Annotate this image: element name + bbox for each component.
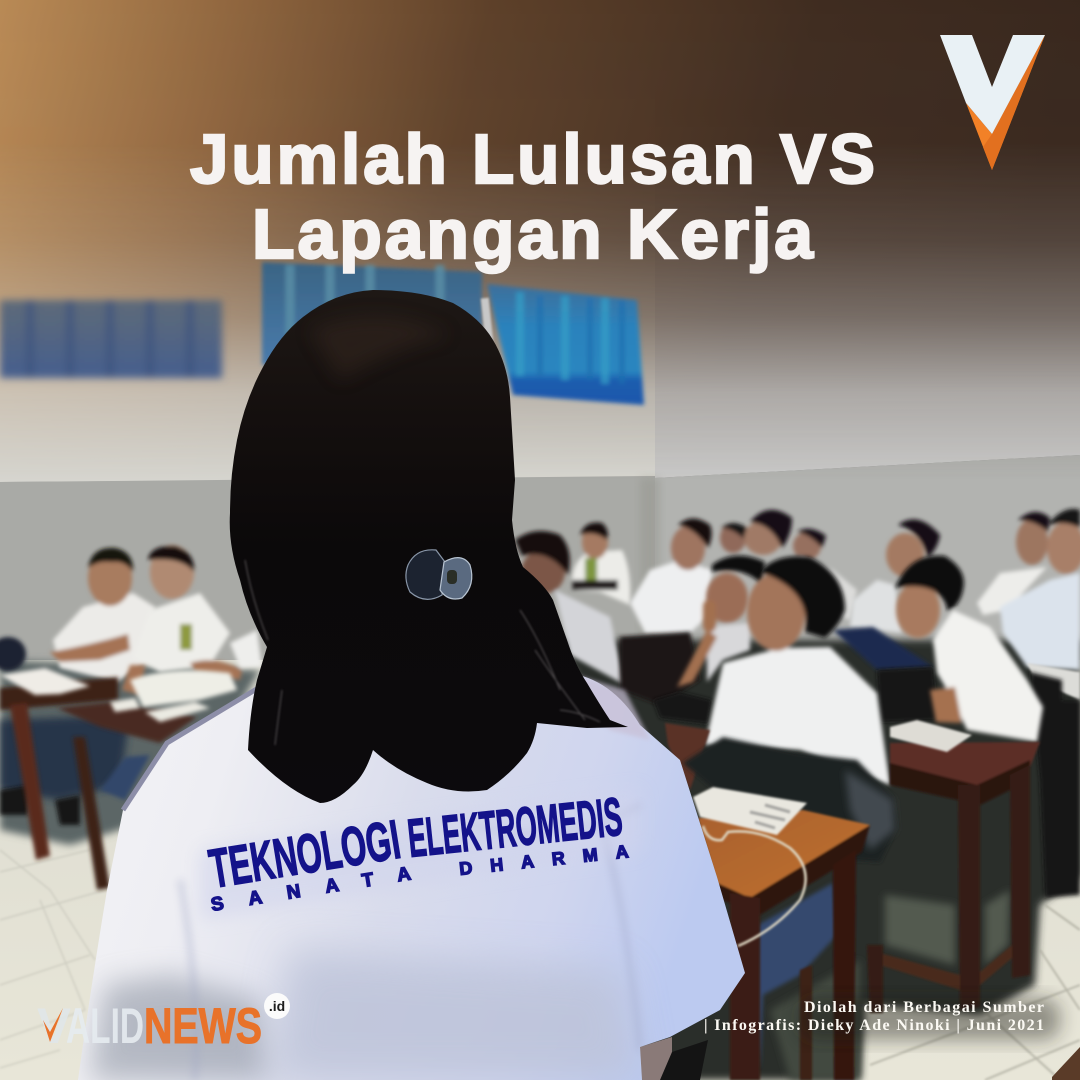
hair bbox=[230, 290, 628, 803]
logo: validnews.id bbox=[37, 993, 290, 1054]
white desk edge far right bbox=[1027, 663, 1080, 700]
classroom windows bbox=[0, 262, 644, 405]
black bag bbox=[877, 667, 938, 722]
left student one bbox=[50, 548, 155, 682]
floor bbox=[0, 660, 1080, 1080]
rear left desk edge bbox=[665, 723, 710, 790]
logo: V mark bbox=[940, 35, 1045, 170]
shirt lettering: TEKNOLOGI bbox=[205, 808, 404, 900]
shirt lettering: SANATA bbox=[209, 864, 413, 916]
rear student with glasses bbox=[630, 518, 712, 633]
right desks and belongings bbox=[665, 720, 1080, 1080]
source credit: | Infografis: Dieky Ade Ninoki | Juni 2021 bbox=[704, 1017, 1044, 1034]
student leaning on hand bbox=[677, 556, 765, 687]
centre front student bbox=[705, 556, 890, 785]
shirt bbox=[78, 670, 745, 1080]
shirt collar stripe bbox=[123, 687, 260, 810]
source credit bbox=[704, 999, 1044, 1034]
title: Jumlah Lulusan VS bbox=[190, 120, 878, 198]
navy jacket bbox=[833, 627, 933, 670]
hair strands bbox=[245, 560, 600, 745]
right wall bbox=[655, 0, 1080, 478]
dark jacket bbox=[683, 737, 897, 862]
left wall bbox=[0, 0, 655, 482]
green-grey floor between desks bbox=[885, 895, 955, 965]
hair clip bbox=[406, 550, 472, 599]
shirt shadows bbox=[90, 790, 640, 1080]
left desk two bbox=[57, 702, 197, 890]
wall corner shade bbox=[640, 478, 660, 648]
logo: validnews.id: V bbox=[37, 998, 72, 1054]
bottom right stool bbox=[1052, 1047, 1080, 1080]
left desks and belongings bbox=[0, 668, 237, 890]
students seated in rear rows bbox=[0, 509, 1080, 898]
left window bbox=[0, 300, 222, 378]
shirt lettering: DHARMA bbox=[458, 841, 629, 879]
shoes left bbox=[0, 785, 80, 825]
left desk one bbox=[0, 677, 118, 860]
left dark bag bbox=[0, 637, 26, 671]
centre student facing away bbox=[515, 531, 625, 685]
lower wall band right bbox=[655, 455, 1080, 680]
cable bbox=[703, 826, 806, 946]
left student two bbox=[133, 545, 262, 680]
shirt lettering: ELEKTROMEDIS bbox=[405, 787, 625, 869]
middle window bbox=[262, 262, 482, 370]
seated legs left bbox=[0, 715, 130, 800]
floor tiles left bbox=[0, 850, 105, 1068]
dark bags under rear row bbox=[620, 632, 700, 705]
source credit: Diolah dari Berbagai Sumber bbox=[804, 999, 1044, 1016]
window strap bbox=[481, 298, 493, 344]
trousers bbox=[755, 883, 837, 1070]
presenter from behind bbox=[78, 290, 745, 1080]
logo: validnews.id: NEWS bbox=[144, 998, 262, 1054]
right rear student bbox=[850, 519, 940, 633]
lower wall band left bbox=[0, 476, 655, 665]
right front student bbox=[895, 556, 1043, 742]
logo: validnews.id: .id bbox=[269, 998, 285, 1014]
floor tiles right bbox=[870, 905, 1080, 1080]
student behind left arm bbox=[122, 665, 145, 695]
book print bbox=[750, 805, 790, 828]
paper on rear desk bbox=[890, 720, 972, 752]
far right chair bbox=[1030, 672, 1080, 898]
front desk bbox=[698, 810, 870, 1080]
dark area under right desks bbox=[560, 640, 1080, 1080]
credit backing shadow bbox=[800, 998, 1060, 1040]
hair sheen bbox=[310, 316, 450, 380]
arm and shoe below sleeve bbox=[640, 1037, 708, 1080]
logo: validnews.id: ALID bbox=[66, 998, 144, 1054]
dark area under left desks bbox=[0, 660, 260, 845]
neck reflection bbox=[560, 670, 650, 740]
trousers left bbox=[100, 755, 150, 800]
title bbox=[190, 120, 878, 273]
shirt lettering bbox=[205, 787, 629, 916]
right window bbox=[487, 284, 644, 405]
far right rear students bbox=[977, 509, 1080, 670]
book on front desk bbox=[693, 787, 807, 835]
rear student centre with tie bbox=[572, 522, 630, 605]
papers on left desk bbox=[0, 668, 237, 722]
title: Lapangan Kerja bbox=[252, 195, 816, 273]
rear middle students bbox=[720, 510, 857, 620]
bag on desk bbox=[653, 692, 712, 724]
rear desk bbox=[867, 742, 1040, 1013]
jacket highlight bbox=[845, 770, 895, 850]
top colour overlay bbox=[0, 0, 1080, 480]
